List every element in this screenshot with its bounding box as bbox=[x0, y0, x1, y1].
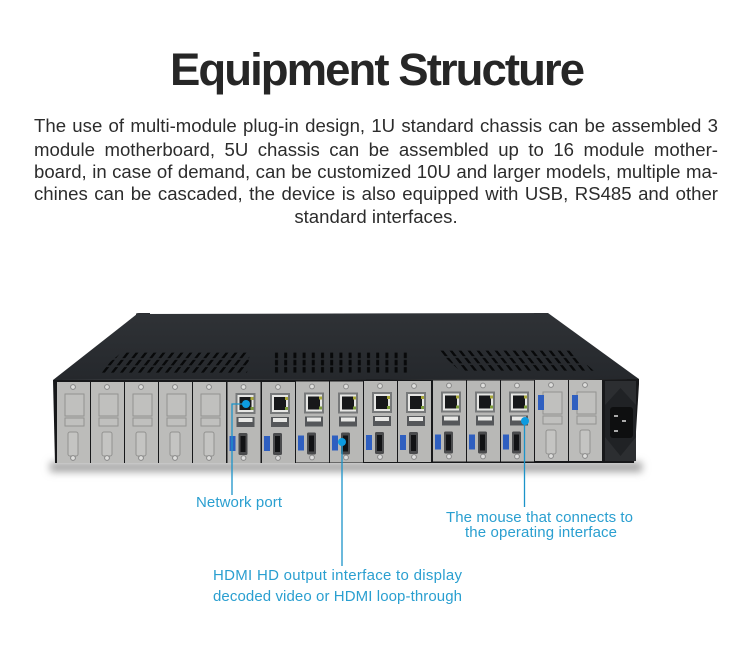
power socket bbox=[605, 381, 636, 461]
mounting ears bbox=[136, 313, 548, 320]
callout: mouse port bbox=[446, 417, 633, 541]
intro text block: module motherboard, 5U chassis can be assembled up to 16 module mother- bbox=[34, 138, 718, 160]
callout: HDMI output: decoded video or HDMI loop-through bbox=[213, 588, 462, 605]
callout: mouse port: the operating interface bbox=[465, 524, 617, 541]
callout: network port bbox=[196, 400, 283, 511]
intro text block bbox=[34, 114, 718, 226]
callout: HDMI output bbox=[213, 438, 462, 605]
intro text block: chines can be cascaded, the device is also equipped with USB, RS485 and other bbox=[34, 183, 718, 204]
vents bbox=[97, 350, 594, 373]
intro text block: The use of multi-module plug-in design, 1U standard chassis can be assembled 3 bbox=[34, 114, 718, 136]
top cover bbox=[53, 313, 639, 380]
callout: mouse port: The mouse that connects to bbox=[446, 509, 633, 526]
title: Equipment Structure bbox=[170, 44, 585, 95]
slot modules bbox=[57, 380, 602, 463]
front plate bbox=[53, 379, 639, 463]
intro text block: board, in case of demand, can be customized 10U and larger models, multiple ma- bbox=[34, 161, 718, 182]
callout: network port: Network port bbox=[196, 494, 283, 511]
callout: HDMI output: HDMI HD output interface to display bbox=[213, 567, 462, 584]
shadow under chassis bbox=[50, 462, 642, 472]
intro text block: standard interfaces. bbox=[294, 206, 458, 226]
chassis bbox=[53, 313, 639, 463]
